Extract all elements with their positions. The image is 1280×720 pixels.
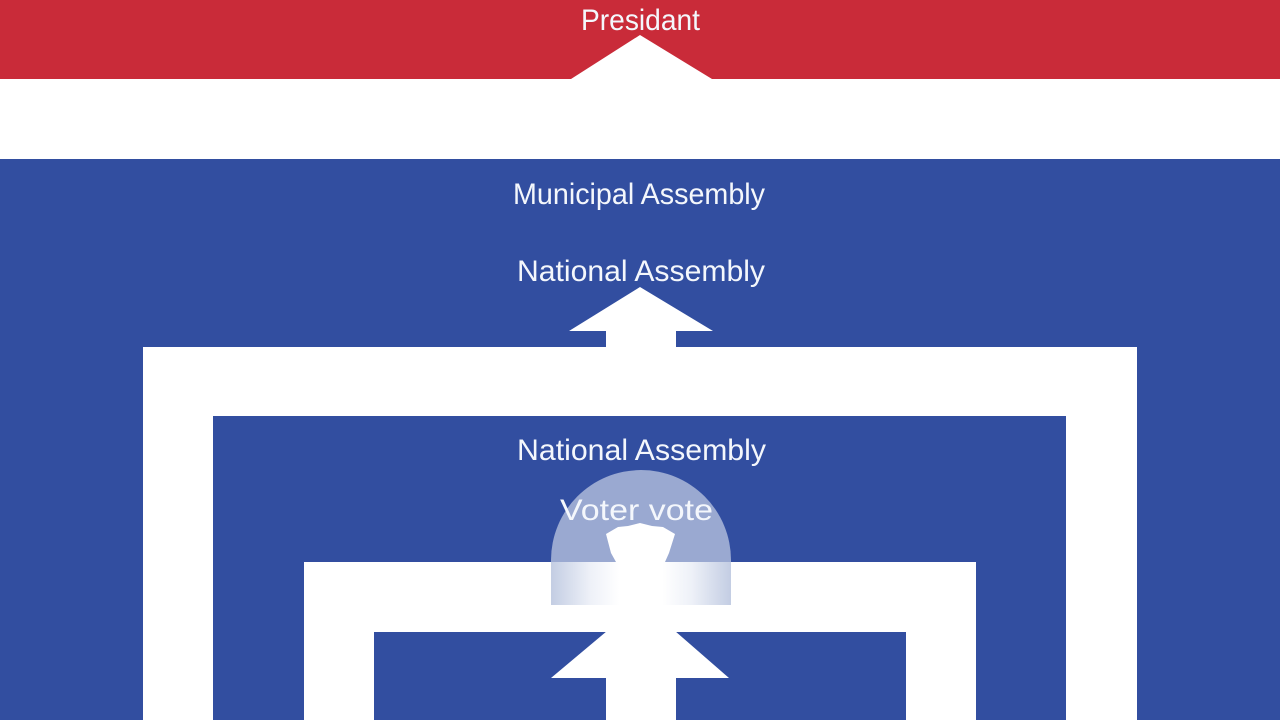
icon: translucent voter dome <box>551 470 731 562</box>
text: national assembly upper label: National Assembly <box>517 255 765 288</box>
panel: innermost blue area <box>374 632 906 720</box>
text: national assembly lower label: National Assembly <box>517 434 766 467</box>
arrow: president arrow <box>571 35 712 82</box>
text: municipal assembly label: Municipal Assembly <box>513 178 765 211</box>
panel: red top band <box>0 0 1280 79</box>
arrow: national assembly arrow <box>569 287 713 348</box>
panel: outer inner blue area <box>213 416 1066 720</box>
panel: inner white frame <box>304 562 976 720</box>
icon: white voter figure <box>606 523 675 562</box>
text: voter vote label: Voter vote <box>560 494 713 527</box>
icon: voter dome fading reflection <box>551 562 731 605</box>
title: president label: Presidant <box>581 4 701 37</box>
panel: blue main area <box>0 159 1280 720</box>
arrow: lower arrow <box>551 631 729 720</box>
panel: outer white frame <box>143 347 1137 720</box>
